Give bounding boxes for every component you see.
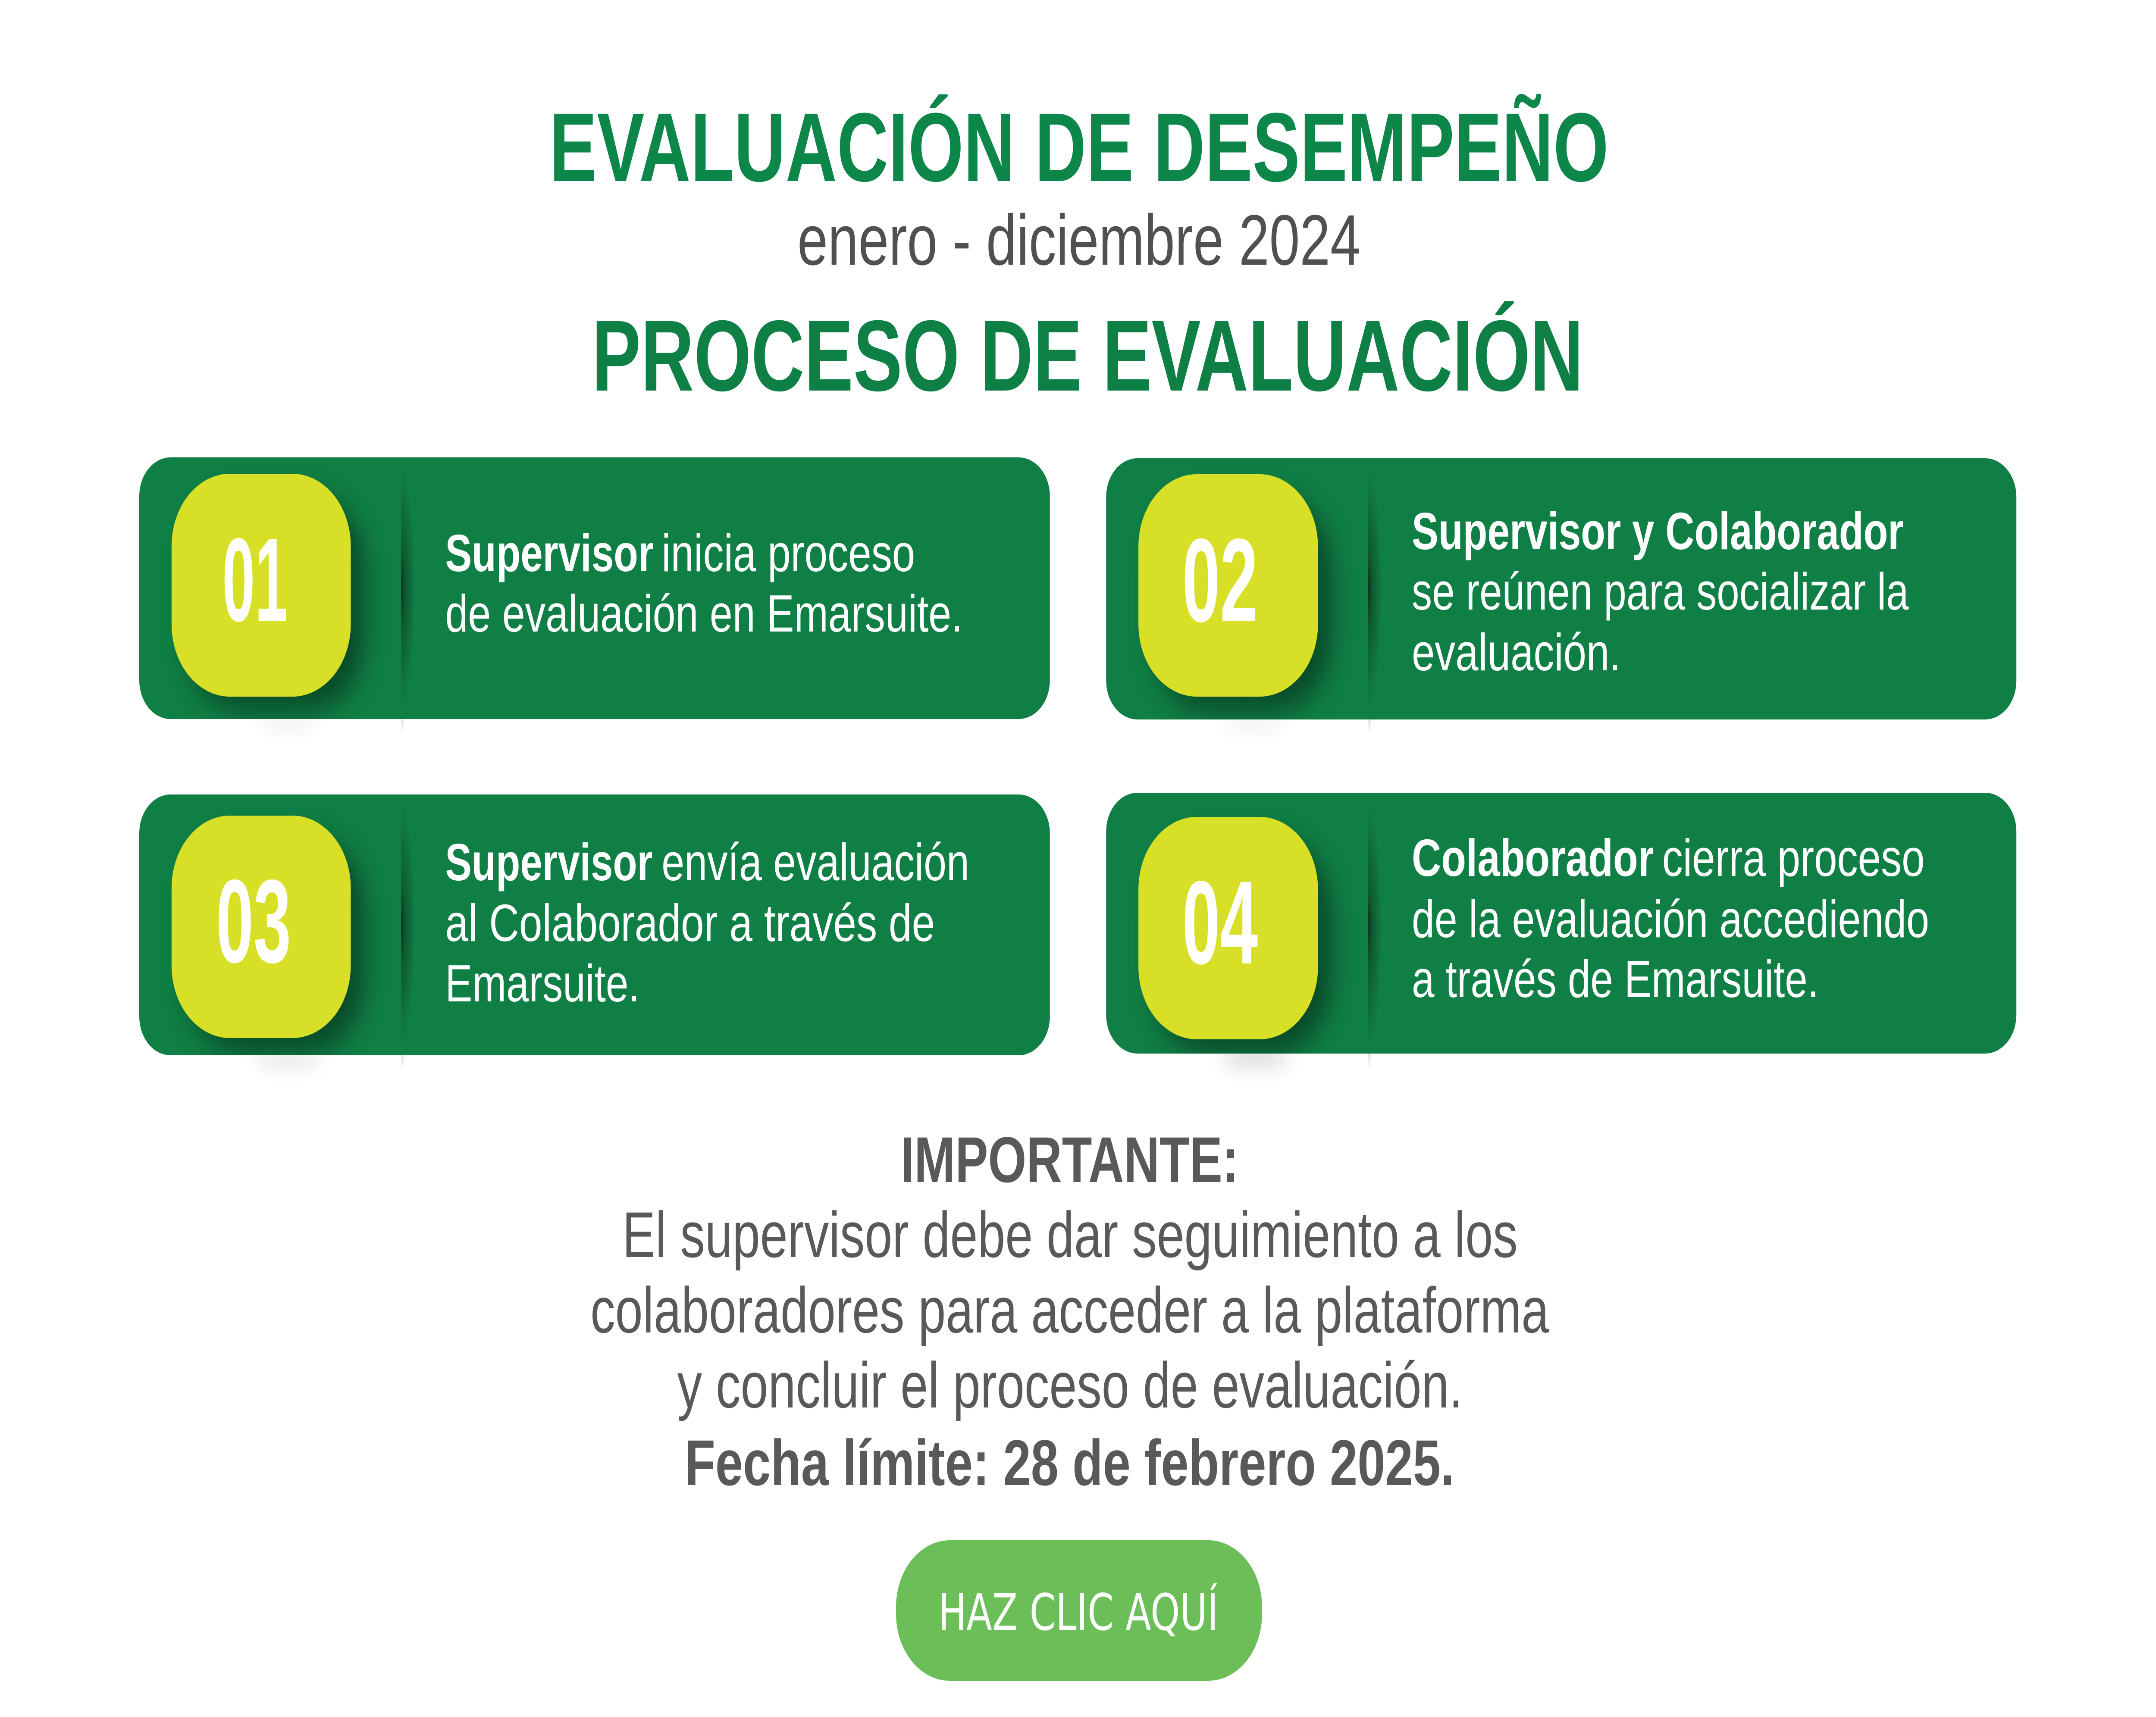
badge: 03 <box>172 816 351 1038</box>
button: Haz clic aquí: HAZ CLIC AQUÍ <box>938 1583 1218 1642</box>
heading: Importante: IMPORTANTE: <box>900 1124 1239 1196</box>
text: step 04 description: a través de Emarsuite. <box>1412 950 1819 1008</box>
text: step 03 description: Supervisor <box>445 833 652 891</box>
panel: step 01 <box>139 457 1050 734</box>
badge: 02: 02 <box>1182 514 1258 646</box>
text: step 01 description <box>445 524 963 643</box>
text: step 03 description: al Colaborador a través de <box>445 894 935 952</box>
text: notice body: El supervisor debe dar seguimiento a los <box>622 1199 1518 1271</box>
text: notice body <box>590 1199 1549 1421</box>
text: step 03 description: Emarsuite. <box>445 954 640 1013</box>
text: step 01 description: inicia proceso <box>661 524 915 582</box>
text: step 02 description: Supervisor y Colaborador <box>1412 502 1903 560</box>
text: notice body: colaboradores para acceder a la plataforma <box>590 1274 1549 1346</box>
panel: step 04 <box>1106 793 2016 1071</box>
callout: important notice <box>590 1124 1549 1499</box>
title: Evaluación de Desempeño: EVALUACIÓN DE DESEMPEÑO <box>549 92 1609 202</box>
panel: step 02 <box>1106 458 2016 734</box>
badge: 02 <box>1138 474 1318 697</box>
text: step 02 description <box>1412 502 1909 682</box>
text: step 03 description <box>445 833 969 1013</box>
subtitle: date range: enero - diciembre 2024 <box>797 200 1361 280</box>
text: step 01 description: Supervisor <box>445 524 654 582</box>
text: step 03 description: envía evaluación <box>661 833 969 891</box>
badge: 04 <box>1138 817 1318 1039</box>
text: step 04 description: Colaborador <box>1412 829 1654 887</box>
badge: 01 <box>172 474 351 697</box>
panel: step 03 <box>139 794 1050 1071</box>
text: step 04 description: de la evaluación accediendo <box>1412 890 1929 948</box>
text: step 02 description: se reúnen para socializar la <box>1412 563 1909 621</box>
text: step 04 description: cierra proceso <box>1662 829 1925 887</box>
text: step 04 description <box>1412 829 1929 1008</box>
badge: 03: 03 <box>216 855 291 987</box>
text: step 01 description: de evaluación en Emarsuite. <box>445 585 963 643</box>
text: deadline: Fecha límite: 28 de febrero 2025. <box>685 1427 1454 1499</box>
text: notice body: y concluir el proceso de evaluación. <box>677 1349 1463 1421</box>
text: step 02 description: evaluación. <box>1412 623 1621 682</box>
heading: Proceso de Evaluación: PROCESO DE EVALUACIÓN <box>592 300 1583 413</box>
badge: 01: 01 <box>222 513 288 646</box>
button: Haz clic aquí <box>896 1540 1262 1681</box>
badge: 04: 04 <box>1182 856 1258 988</box>
